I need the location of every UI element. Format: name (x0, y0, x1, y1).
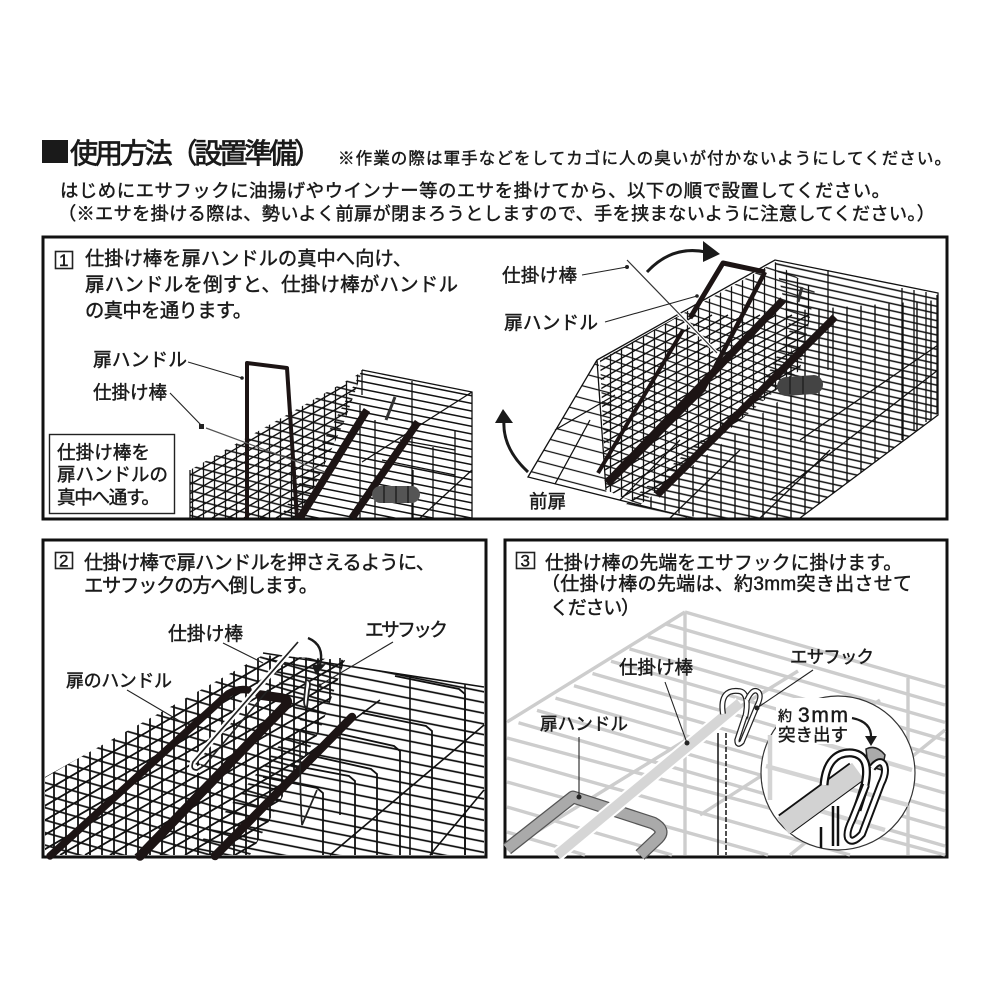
callout: 真中へ通す。 (57, 487, 160, 508)
label: approx 3mm: 約 (778, 708, 792, 724)
label: door handle (66, 671, 183, 723)
label: bait hook (318, 619, 448, 686)
label: front door: 前扉 (529, 491, 566, 512)
label: approx 3mm: 3mm (798, 704, 848, 727)
label: trigger rod left: 仕掛け棒 (93, 382, 167, 403)
step 3 text: （仕掛け棒の先端は、約3mm突き出させて (541, 573, 912, 595)
arrow: protrusion pointer (852, 718, 877, 746)
title: 使用方法（設置準備） (70, 138, 322, 169)
callout: 扉ハンドルの (57, 464, 168, 485)
label: bait hook (754, 647, 874, 710)
arrow: rod direction (308, 638, 326, 675)
label: door handle: 扉ハンドル (540, 714, 628, 734)
label: trigger rod: 仕掛け棒 (619, 657, 693, 678)
label: approx 3mm (778, 704, 848, 745)
illustration: cage with door raised (527, 259, 939, 518)
label: trigger rod right (502, 265, 629, 286)
step 1 text (85, 248, 458, 322)
label: door handle right: 扉ハンドル (504, 312, 598, 333)
callout (50, 434, 174, 514)
step 3 number: 3 (520, 552, 530, 570)
step 2 text (84, 552, 435, 597)
step 1 text: の真中を通ります。 (85, 300, 252, 322)
arrow: door rotation (495, 409, 528, 472)
inset: hook detail (761, 696, 915, 850)
step 1 text: 扉ハンドルを倒すと、仕掛け棒がハンドル (85, 274, 458, 296)
label: door handle (540, 714, 628, 800)
step 2 text: 仕掛け棒で扉ハンドルを押さえるように、 (84, 552, 435, 574)
illustration: cage top with handle lowered (45, 642, 484, 861)
label: trigger rod: 仕掛け棒 (168, 623, 243, 644)
label: approx 3mm: 突き出す (778, 725, 848, 745)
step 2 number (56, 552, 72, 570)
panel: step 1 (43, 237, 968, 519)
step 2 text: エサフックの方へ倒します。 (84, 575, 318, 597)
step 3 text (541, 552, 912, 619)
illustration: cage with handle upright (189, 361, 473, 520)
intro text: （※エサを掛ける際は、勢いよく前扉が閉まろうとしますので、手を挟まないように注意してください。） (58, 204, 935, 224)
label: trigger rod left (93, 382, 204, 429)
label: trigger rod (619, 657, 693, 746)
intro text (58, 180, 935, 224)
arrow: rod rotation (647, 241, 720, 272)
label: door handle left (93, 349, 244, 380)
panel: step 2 (42, 538, 488, 861)
label: trigger rod right: 仕掛け棒 (502, 265, 577, 286)
label: door handle: 扉のハンドル (66, 671, 172, 691)
step 2 number: 2 (59, 552, 68, 570)
panel: step 3 (505, 540, 947, 857)
label: door handle left: 扉ハンドル (93, 349, 187, 370)
intro text: はじめにエサフックに油揚げやウインナー等のエサを掛けてから、以下の順で設置してください。 (60, 180, 890, 201)
step 3 number (516, 552, 534, 570)
illustration: grey mesh with hook (507, 612, 945, 855)
step 1 number: 1 (59, 251, 68, 270)
label: bait hook: エサフック (790, 647, 874, 667)
note: gloves: ※作業の際は軍手などをしてカゴに人の臭いが付かないようにしてください。 (338, 148, 951, 168)
label: door handle right (504, 294, 699, 333)
label: bait hook: エサフック (365, 619, 448, 640)
callout: 仕掛け棒を (57, 442, 150, 463)
label: trigger rod (168, 623, 263, 663)
step 1 number (56, 251, 72, 270)
step 3 text: ください） (550, 597, 640, 619)
step 3 text: 仕掛け棒の先端をエサフックに掛けます。 (545, 552, 902, 573)
step 1 text: 仕掛け棒を扉ハンドルの真中へ向け、 (85, 248, 412, 270)
